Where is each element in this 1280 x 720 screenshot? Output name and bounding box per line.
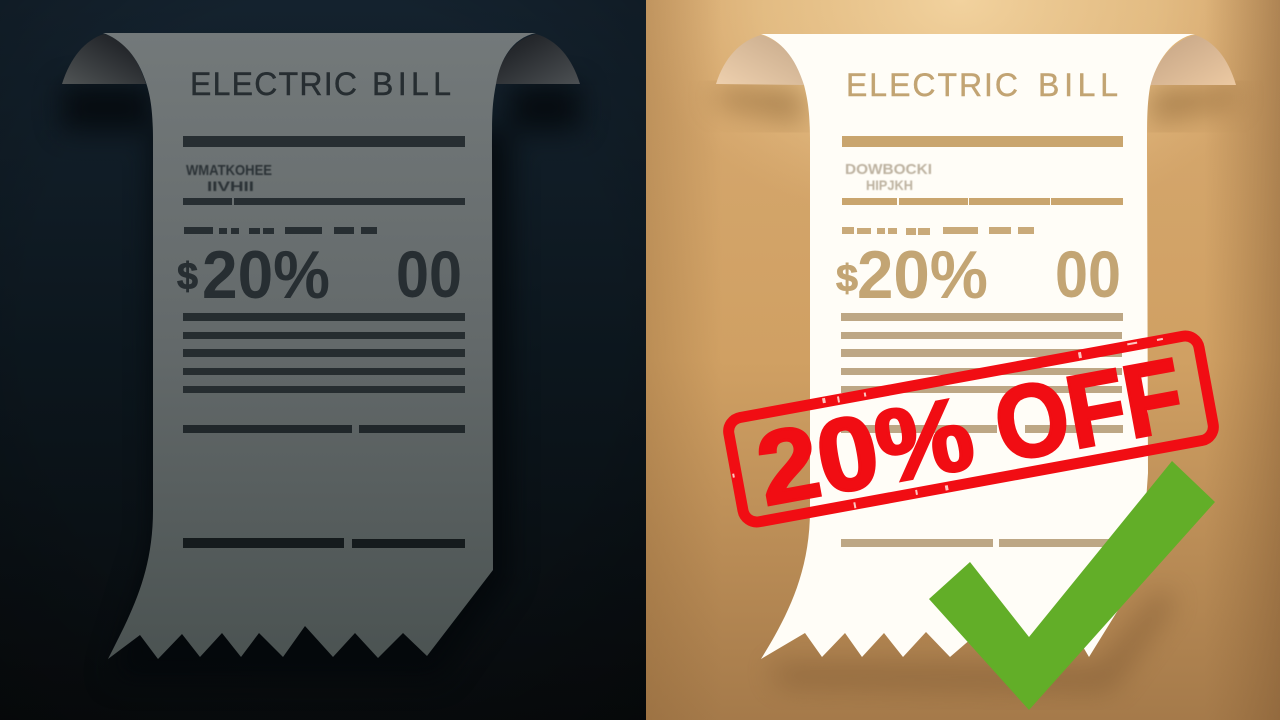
dashed row — [184, 227, 377, 234]
dashed row — [842, 227, 1034, 235]
header rule — [842, 136, 1123, 147]
header rule — [183, 136, 465, 147]
amount text — [177, 237, 462, 313]
paper curl: left — [716, 35, 804, 85]
panel: before, dark background — [0, 0, 646, 720]
subtotal rule — [183, 425, 465, 433]
smudged account text: DOWBOCKI — [845, 161, 932, 178]
panel: after, warm background — [646, 0, 1280, 720]
receipt: white discounted bill — [761, 34, 1195, 659]
amount text: 20% — [857, 237, 988, 313]
receipt heading: BILL — [1038, 67, 1118, 103]
smudged account text: IIVHII — [207, 178, 254, 194]
smudged account text — [186, 162, 272, 194]
line items — [183, 313, 465, 393]
receipt heading: BILL — [372, 66, 451, 102]
amount text: 20% — [202, 237, 330, 313]
icon: green check mark — [929, 461, 1215, 710]
amount text: 00 — [396, 237, 462, 311]
smudged account text — [845, 161, 932, 193]
receipt: grey unpaid bill — [103, 33, 536, 659]
subtotal rule — [841, 425, 1123, 433]
smudged account text: WMATKOHEE — [186, 162, 272, 179]
stamp: 20% off: OFF — [986, 336, 1191, 484]
paper curl: left — [62, 34, 146, 84]
paper curl: right — [494, 34, 580, 84]
receipt heading: ELECTRIC — [846, 67, 1018, 103]
divider rule — [183, 198, 465, 205]
divider rule — [842, 198, 1123, 205]
amount text: 00 — [1055, 237, 1121, 311]
total rule — [183, 538, 465, 548]
amount text: $ — [836, 258, 858, 300]
amount text — [836, 237, 1121, 313]
stamp: 20% off: 20% — [749, 375, 982, 527]
line items — [841, 313, 1123, 393]
amount text: $ — [177, 256, 198, 298]
stamp: 20% off — [722, 330, 1217, 532]
paper curl: right — [1150, 35, 1236, 85]
total rule — [841, 539, 1109, 547]
receipt heading: ELECTRIC — [190, 66, 357, 102]
smudged account text: HIPJKH — [866, 177, 913, 193]
